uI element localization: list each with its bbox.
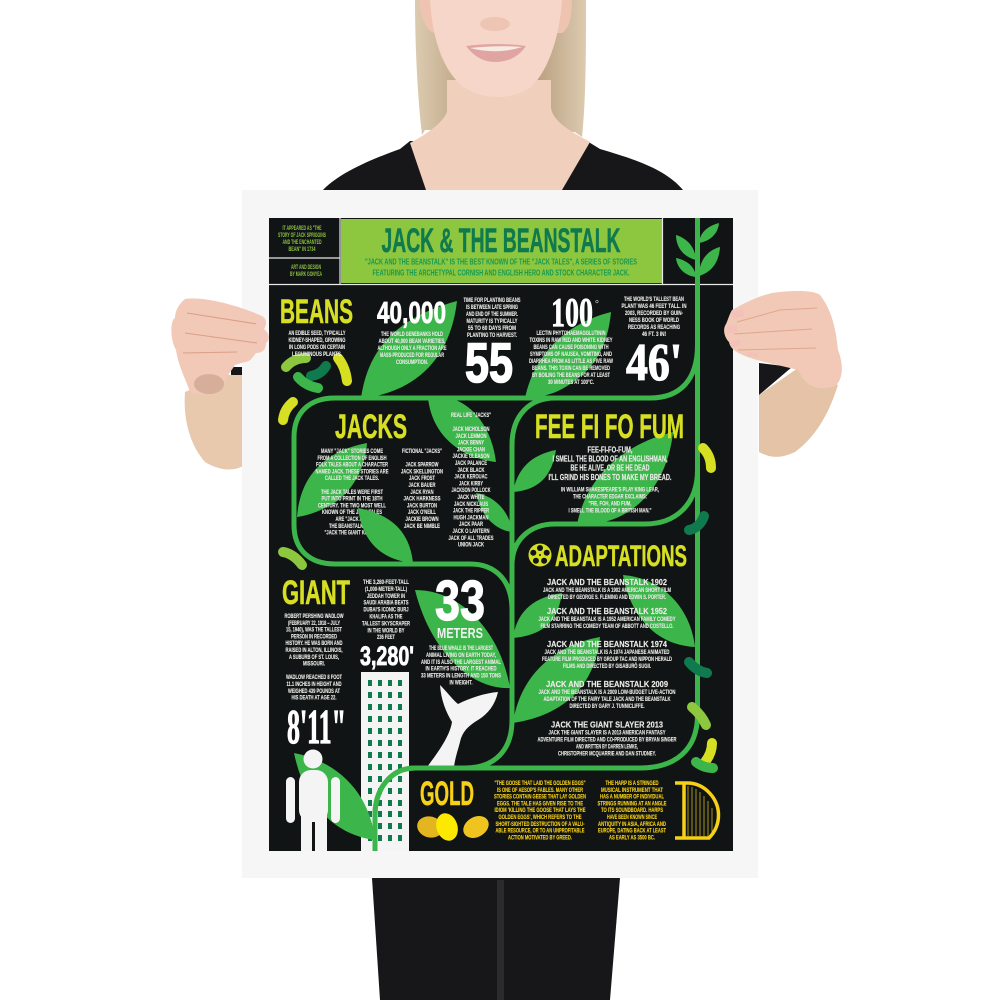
- text: bean description: LEGUMINOUS PLANTS.: [292, 351, 342, 358]
- text: lectin: BEANS CAN CAUSE POISONING WITH: [534, 344, 609, 351]
- list: fictional jacks: JACK BAUER: [408, 482, 436, 489]
- text: tallest bean plant: NESS BOOK OF WORLD: [629, 317, 679, 324]
- list: real life jacks: JACK BENNY: [458, 440, 484, 447]
- text: king lear: "FIE, FOH, AND FUM,: [588, 500, 632, 508]
- beanstalk leaves: [294, 301, 695, 840]
- text: robert wadlow: A SUBURB OF ST. LOUIS,: [289, 654, 339, 661]
- text: king lear: [561, 486, 659, 514]
- list: real life jacks: JACKIE GLEASON: [452, 453, 490, 460]
- list: real life jacks: UNION JACK: [458, 542, 484, 549]
- text: jack tales intro: PUT INTO PRINT IN THE 18TH: [322, 496, 383, 503]
- heading: giant: GIANT: [282, 574, 350, 612]
- photo: right hand gripping poster: [724, 291, 842, 388]
- stat: 46 feet: 46': [626, 334, 682, 392]
- list: real life jacks: JACK BLACK: [458, 467, 485, 474]
- poster black background: [269, 218, 733, 851]
- text: blue whale: THE BLUE WHALE IS THE LARGEST: [429, 645, 493, 652]
- text: tallest bean plant: RECORDS AS REACHING: [628, 324, 680, 331]
- text: jack tales intro: FOLK TALES ABOUT A CHARACTER: [316, 462, 388, 469]
- list: fictional jacks: [401, 448, 443, 530]
- stat: 55: 55: [465, 331, 513, 394]
- subtitle text: [365, 256, 637, 278]
- icon: person: [286, 750, 340, 851]
- text: robert wadlow: WEIGHED 439 POUNDS AT: [288, 688, 340, 695]
- heading: title: JACK & THE BEANSTALK: [382, 222, 621, 260]
- text: planting time: PLANTING TO HARVEST.: [467, 332, 517, 339]
- list: real life jacks: JACK LEMMON: [456, 433, 487, 440]
- panel: tower text: [360, 579, 414, 671]
- text: golden goose: EGGS. THE TALE HAS GIVEN RISE TO THE: [497, 800, 583, 807]
- text: golden goose: IDIOM 'KILLING THE GOOSE THAT LAYS THE: [494, 807, 586, 814]
- list: fictional jacks: JACK HARKNESS: [404, 496, 441, 503]
- text: harp: HAS A NUMBER OF INDIVIDUAL: [600, 794, 664, 801]
- film: 1902: JACK AND THE BEANSTALK 1902: [547, 577, 667, 587]
- text: planting time: AND END OF THE SUMMER.: [466, 311, 518, 318]
- label: meters: METERS: [437, 625, 483, 642]
- text: bean description: IN LONG PODS ON CERTAIN: [289, 344, 345, 351]
- note: first appearance: BY MARK GONYEA: [290, 272, 322, 278]
- stat: 100 degrees: 100: [551, 289, 593, 335]
- text: jack tales intro: CENTURY. THE TWO MOST WELL: [318, 502, 386, 509]
- text: tallest bean plant: 46 FT. 3 IN!: [642, 331, 666, 338]
- text: rhyme: [548, 444, 672, 482]
- film: 1974: JACK AND THE BEANSTALK IS A 1974 JAPANESE ANIMATED: [544, 649, 670, 656]
- text: genebanks: ALTHOUGH ONLY A FRACTION ARE: [378, 345, 447, 352]
- beanstalk stems: [294, 218, 698, 851]
- text: lectin: DIARRHEA FROM AS LITTLE AS FIVE RAW: [529, 358, 614, 365]
- text: rhyme: BE HE ALIVE, OR BE HE DEAD: [570, 463, 650, 473]
- list: real life jacks: JACKSON POLLOCK: [452, 487, 491, 494]
- header green banner: [341, 219, 662, 283]
- text: genebanks: MASS-PRODUCED FOR REGULAR: [380, 352, 444, 359]
- list: real life jacks: JACK THE RIPPER: [453, 508, 489, 515]
- icon: whale tail: [427, 685, 498, 767]
- list: fictional jacks: JACK RYAN: [410, 489, 434, 496]
- list: fictional jacks: JACK FROST: [409, 475, 435, 482]
- text: blue whale: IN WEIGHT.: [450, 680, 473, 686]
- text: harp: STRINGS RUNNING AT AN ANGLE: [598, 800, 667, 807]
- list: fictional jacks: JACK BE NIMBLE: [404, 523, 440, 530]
- heading: beans: BEANS: [280, 293, 353, 331]
- text: planting time: 55 TO 60 DAYS FROM: [468, 325, 516, 332]
- list: fictional jacks: JACK SKELLINGTON: [401, 468, 443, 475]
- text: robert wadlow: PERSON IN RECORDED: [291, 633, 337, 640]
- text: jeddah tower: (1,000-METER-TALL): [365, 586, 407, 593]
- list: real life jacks: REAL LIFE "JACKS": [451, 412, 491, 419]
- heading: gold: GOLD: [420, 775, 474, 813]
- text: harp: HAVE BEEN KNOWN SINCE: [607, 814, 657, 821]
- list: real life jacks: JACK PAAR: [459, 521, 483, 528]
- film: 2009: [538, 679, 676, 710]
- photo: left hand gripping poster: [171, 298, 269, 394]
- text: jack tales intro: KNOWN OF THE JACK TALES: [322, 509, 382, 516]
- list: real life jacks: JACK WHITE: [458, 494, 485, 501]
- film: 1952: [538, 606, 676, 630]
- list: fictional jacks: JACKIE BROWN: [406, 516, 439, 523]
- text: bean description: AN EDIBLE SEED, TYPICALLY: [288, 330, 346, 337]
- text: lectin: BEANS. THIS TOXIN CAN BE REMOVED: [532, 365, 610, 372]
- list: real life jacks: JACK PALANCE: [455, 460, 487, 467]
- note: first appearance: IT APPEARED AS "THE: [282, 226, 322, 232]
- text: jack tales intro: NAMED JACK. THESE STORIES ARE: [316, 468, 389, 475]
- film: 1974: FILMS AND DIRECTED BY GISABURŌ SUGII.: [563, 662, 651, 670]
- panel: jacks: [316, 408, 494, 563]
- stat: 33: 33: [435, 569, 485, 633]
- film: 2013: JACK THE GIANT SLAYER 2013: [551, 720, 663, 730]
- film: 2013: CHRISTOPHER MCQUARRIE AND DAN STUDNEY.: [558, 750, 656, 758]
- text: robert wadlow: 15, 1940), WAS THE TALLEST: [286, 627, 342, 634]
- film: 2013: AND WRITTEN BY DARREN LEMKE,: [576, 744, 638, 750]
- text: tallest bean plant: PLANT WAS 46 FEET TALL. IN: [622, 303, 687, 310]
- film: 1974: FEATURE FILM PRODUCED BY GROUP TAC AND NIPPON HERALD: [542, 656, 672, 663]
- text: golden goose: "THE GOOSE THAT LAID THE GOLDEN EGGS": [494, 780, 586, 787]
- list: real life jacks: JACK NICKLAUS: [454, 501, 488, 508]
- film: 2013: ADVENTURE FILM DIRECTED AND CO-PRODUCED BY BRYAN SINGER: [538, 736, 677, 744]
- leaf over jack text: [358, 508, 413, 563]
- decorative beans: [283, 358, 713, 768]
- text: jack tales intro: [316, 448, 389, 537]
- film: 1974: [542, 639, 672, 670]
- text: harp: MUSICAL INSTRUMENT THAT: [601, 787, 663, 794]
- text: jack tales intro: MANY "JACK" STORIES COME: [321, 448, 383, 455]
- text: planting time: [464, 297, 521, 339]
- text: golden goose: SHORT-SIGHTED DESTRUCTION OF A VALU-: [496, 821, 584, 828]
- stat: 100 degrees: °: [595, 299, 599, 311]
- text: jeddah tower: THE 3,280-FEET-TALL: [363, 579, 409, 586]
- icon: sprout leaves at top of stalk: [676, 223, 720, 277]
- text: lectin: LECTIN PHYTOHAEMAGGLUTININ: [536, 330, 606, 337]
- text: genebanks: [378, 331, 447, 366]
- text: lectin: 30 MINUTES AT 100°C.: [548, 378, 594, 386]
- panel: fee fi fo fum: [535, 408, 684, 514]
- text: jeddah tower: [362, 579, 410, 641]
- text: golden goose: STORIES CONTAIN GEESE THAT LAY GOLDEN: [494, 794, 586, 801]
- film: 2009: JACK AND THE BEANSTALK IS A 2009 LOW-BUDGET LIVE-ACTION: [538, 689, 676, 696]
- text: robert wadlow: MISSOURI.: [303, 661, 325, 668]
- list: real life jacks: [448, 412, 494, 549]
- film: 2009: ADAPTATION OF THE FAIRY TALE JACK AND THE BEANSTALK: [544, 696, 671, 703]
- panel: beans: [280, 289, 687, 394]
- text: harp: [598, 780, 667, 841]
- list: real life jacks: JACK KEROUAC: [454, 474, 488, 481]
- film: 2013: JACK THE GIANT SLAYER IS A 2013 AMERICAN FANTASY: [548, 730, 666, 736]
- text: blue whale: 33 METERS IN LENGTH AND 150 TONS: [421, 673, 501, 680]
- text: tallest bean plant: THE WORLD'S TALLEST BEAN: [624, 296, 684, 303]
- text: robert wadlow: HIS DEATH AT AGE 22.: [292, 695, 337, 702]
- poster sheet: [242, 190, 758, 878]
- note: first appearance: STORY OF JACK SPRIGGINS: [278, 233, 326, 239]
- list: fictional jacks: JACK BURTON: [407, 502, 437, 509]
- text: golden goose: ABLE RESOURCE, OR TO AN UNPROFITABLE: [496, 828, 585, 835]
- text: blue whale: IN EARTH'S HISTORY. IT REACHED: [426, 666, 497, 673]
- text: golden goose: IS ONE OF AESOP'S FABLES. MANY OTHER: [497, 787, 583, 794]
- subtitle text: FEATURING THE ARCHETYPAL CORNISH AND ENGLISH HERO AND STOCK CHARACTER JACK.: [372, 268, 630, 278]
- text: tallest bean plant: 2003, RECORDED BY GUIN-: [625, 310, 683, 317]
- text: rhyme: I SMELL THE BLOOD OF AN ENGLISHMAN,: [552, 454, 668, 464]
- film: 1902: JACK AND THE BEANSTALK IS A 1902 AMERICAN SHORT FILM: [543, 587, 671, 594]
- text: genebanks: THE WORLD GENEBANKS HOLD: [381, 331, 443, 338]
- text: lectin: [529, 330, 614, 386]
- text: bean description: KIDNEY-SHAPED, GROWING: [288, 337, 346, 344]
- text: jack tales intro: ARE "JACK AND: [336, 516, 369, 523]
- tower building: [361, 672, 409, 851]
- text: jack tales intro: THE JACK TALES WERE FIRST: [321, 489, 383, 496]
- stat: 40,000: 40,000: [377, 295, 446, 330]
- text: golden goose: ACTION MOTIVATED BY GREED.: [508, 834, 572, 841]
- text: jeddah tower: IN THE WORLD BY: [368, 627, 405, 634]
- list: real life jacks: JACKIE CHAN: [457, 446, 485, 453]
- film: 1974: JACK AND THE BEANSTALK 1974: [547, 639, 667, 649]
- film: 2009: DIRECTED BY GARY J. TUNNICLIFFE.: [570, 703, 645, 710]
- text: planting time: TIME FOR PLANTING BEANS: [464, 297, 521, 304]
- film: 2009: JACK AND THE BEANSTALK 2009: [546, 679, 668, 689]
- panel: whale: [421, 569, 501, 686]
- heading: adaptations: ADAPTATIONS: [555, 540, 687, 573]
- text: robert wadlow: (FEBRUARY 22, 1918 – JULY: [288, 620, 340, 627]
- list: real life jacks: HUGH JACKMAN: [454, 514, 489, 521]
- text: blue whale: AND IT IS ALSO THE LARGEST ANIMAL: [421, 659, 501, 666]
- stat: 3,280 feet: 3,280': [360, 641, 414, 671]
- icon: film reel: [528, 544, 552, 566]
- heading: jacks: JACKS: [335, 408, 407, 446]
- film: 1952: JACK AND THE BEANSTALK IS A 1952 AMERICAN FAMILY COMEDY: [538, 616, 676, 623]
- text: blue whale: [421, 645, 501, 686]
- text: rhyme: FEE-FI-FO-FUM,: [588, 444, 632, 454]
- subtitle text: "JACK AND THE BEANSTALK" IS THE BEST KNOWN OF THE "JACK TALES", A SERIES OF STORIES: [365, 256, 637, 266]
- text: harp: AS EARLY AS 3500 BC.: [609, 834, 655, 841]
- text: genebanks: ABOUT 40,000 BEAN VARIETIES,: [378, 338, 446, 345]
- text: bean description: [288, 330, 346, 358]
- text: jeddah tower: JEDDAH TOWER IN: [367, 593, 405, 600]
- panel: giant: [282, 574, 350, 851]
- text: king lear: IN WILLIAM SHAKESPEARE'S PLAY KING LEAR,: [561, 486, 659, 494]
- list: real life jacks: JACK NICHOLSON: [452, 426, 490, 433]
- photo: model behind poster: [185, 0, 838, 1000]
- heading: fee fi fo fum: FEE FI FO FUM: [535, 408, 684, 446]
- text: planting time: IS BETWEEN LATE SPRING: [466, 304, 518, 311]
- text: king lear: THE CHARACTER EDGAR EXCLAIMS:: [573, 494, 647, 500]
- text: robert wadlow: HISTORY. HE WAS BORN AND: [286, 640, 343, 647]
- text: planting time: MATURITY IS TYPICALLY: [466, 318, 518, 325]
- text: jeddah tower: DUBAI'S ICONIC BURJ: [364, 607, 409, 614]
- text: jeddah tower: KHALIFA AS THE: [370, 614, 403, 620]
- panel: header: [269, 218, 733, 284]
- text: robert wadlow: 11.1 INCHES IN HEIGHT AND: [286, 681, 342, 688]
- giant stem redraw over person leaf: [375, 768, 430, 851]
- note: first appearance: BEAN" IN 1734: [288, 247, 316, 253]
- text: lectin: SYMPTOMS OF NAUSEA, VOMITING, AND: [530, 351, 612, 358]
- text: robert wadlow: WADLOW REACHED 8 FOOT: [286, 674, 342, 681]
- text: harp: ANTIQUITY IN ASIA, AFRICA AND: [598, 821, 666, 828]
- text: robert wadlow: ROBERT PERSHING WADLOW: [284, 613, 344, 620]
- text: jeddah tower: 236 FEET: [377, 634, 395, 641]
- film: 1902: DIRECTED BY GEORGE S. FLEMING AND EDWIN S. PORTER.: [548, 594, 666, 601]
- icon: golden eggs: [415, 810, 493, 844]
- text: tallest bean plant: [622, 296, 687, 338]
- text: jack tales intro: THE BEANSTALK" AND: [329, 523, 375, 530]
- text: jack tales intro: CALLED THE JACK TALES.: [325, 475, 379, 482]
- text: robert wadlow: [284, 613, 344, 702]
- panel: adaptations: [528, 540, 687, 758]
- stat: 8 foot 11: 8'11": [287, 699, 346, 754]
- film: 1952: FILM STARRING THE COMEDY TEAM OF ABBOTT AND COSTELLO.: [540, 623, 674, 630]
- list: fictional jacks: JACK O'NEILL: [408, 509, 436, 516]
- text: jack tales intro: FROM A COLLECTION OF ENGLISH: [318, 455, 387, 462]
- text: lectin: TOXINS IN RAW RED AND WHITE KIDNEY: [530, 337, 613, 344]
- list: real life jacks: JACK OF ALL TRADES: [448, 535, 494, 542]
- text: robert wadlow: RAISED IN ALTON, ILLINOIS,: [286, 647, 343, 654]
- text: jeddah tower: TALLEST SKYSCRAPER: [362, 620, 410, 627]
- header divider lines: [269, 218, 733, 284]
- text: jack tales intro: "JACK THE GIANT KILLER.": [324, 530, 380, 537]
- list: real life jacks: JACK KIRBY: [459, 480, 483, 487]
- list: real life jacks: JACK O LANTERN: [452, 528, 490, 535]
- text: genebanks: CONSUMPTION.: [396, 359, 428, 366]
- note: first appearance: ART AND DESIGN: [291, 265, 321, 271]
- list: fictional jacks: FICTIONAL "JACKS": [402, 448, 442, 455]
- film: 2013: [538, 720, 677, 758]
- text: golden goose: GOLDEN EGGS', WHICH REFERS TO THE: [498, 814, 582, 821]
- panel: gold: [415, 775, 718, 844]
- text: golden goose: [494, 780, 586, 841]
- film: 1902: [543, 577, 671, 601]
- text: harp: THE HARP IS A STRINGED: [606, 780, 659, 787]
- list: fictional jacks: JACK SPARROW: [406, 462, 439, 469]
- text: harp: EUROPE, DATING BACK AT LEAST: [598, 828, 666, 835]
- text: harp: TO ITS SOUNDBOARD. HARPS: [601, 807, 663, 814]
- text: jeddah tower: SAUDI ARABIA BEATS: [364, 600, 409, 607]
- film: 1952: JACK AND THE BEANSTALK 1952: [547, 606, 667, 616]
- text: rhyme: I'LL GRIND HIS BONES TO MAKE MY BREAD.: [548, 472, 672, 482]
- text: blue whale: ANIMAL LIVING ON EARTH TODAY,: [426, 652, 496, 659]
- text: lectin: BY BOILING THE BEANS FOR AT LEAST: [532, 372, 610, 379]
- note: first appearance: [278, 226, 326, 278]
- note: first appearance: AND THE ENCHANTED: [282, 240, 322, 246]
- icon: harp: [675, 783, 718, 838]
- text: king lear: I SMELL THE BLOOD OF A BRITISH MAN.": [568, 508, 652, 514]
